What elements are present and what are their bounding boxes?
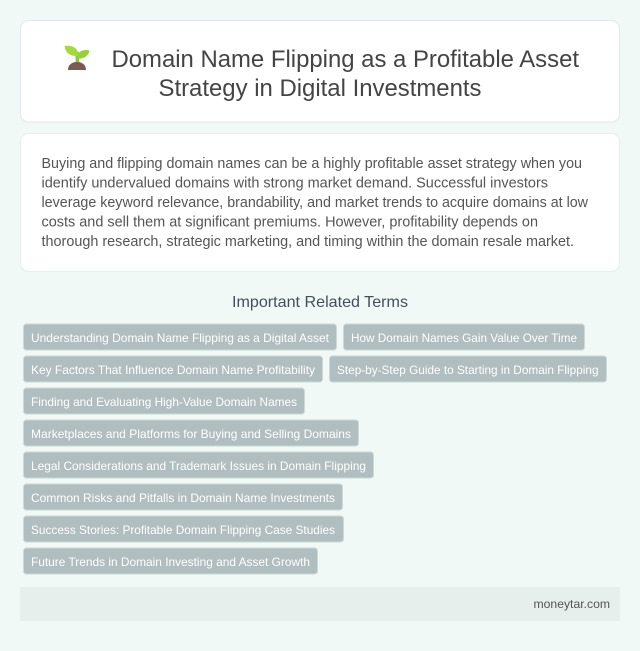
footer: moneytar.com [534,597,610,611]
tag: Key Factors That Influence Domain Name Profitability [31,363,315,377]
tag [24,452,374,478]
summary text: identify undervalued domains with strong market demand. Successful investors [42,176,548,192]
footer [20,587,620,621]
summary text: Buying and flipping domain names can be a highly profitable asset strategy when you [42,156,582,172]
panel: summary card [20,134,620,272]
title: Strategy in Digital Investments [158,75,482,102]
tag [24,388,304,414]
heading: important related terms: Important Related Terms [232,294,408,311]
tag: Step-by-Step Guide to Starting in Domain Flipping [337,363,598,377]
title: Domain Name Flipping as a Profitable Asset [112,46,579,73]
tag list [24,324,606,574]
tag: Understanding Domain Name Flipping as a Digital Asset [31,331,330,345]
tag: Marketplaces and Platforms for Buying and Selling Domains [31,427,351,441]
summary text: costs and sell them at significant premiums. However, profitability depends on [42,214,538,230]
tag [24,548,318,574]
tag [24,484,342,510]
panel: title card [20,20,620,122]
tag [24,420,358,446]
tag [24,516,344,542]
tag: How Domain Names Gain Value Over Time [351,331,577,345]
summary text [42,156,589,250]
tag [24,324,336,350]
tag: Finding and Evaluating High-Value Domain Names [31,395,297,409]
tag [330,356,606,382]
tag: Success Stories: Profitable Domain Flipping Case Studies [31,523,335,537]
summary text: leverage keyword relevance, brandability, and market trends to acquire domains at low [42,195,589,211]
tag [24,356,322,382]
summary text: thorough research, strategic marketing, and timing within the domain resale market. [42,234,574,250]
tag: Legal Considerations and Trademark Issues in Domain Flipping [31,459,366,473]
tag: Common Risks and Pitfalls in Domain Name Investments [31,491,335,505]
icon: sprout [64,46,90,70]
tag: Future Trends in Domain Investing and Asset Growth [31,555,310,569]
title [112,46,579,102]
tag [344,324,584,350]
